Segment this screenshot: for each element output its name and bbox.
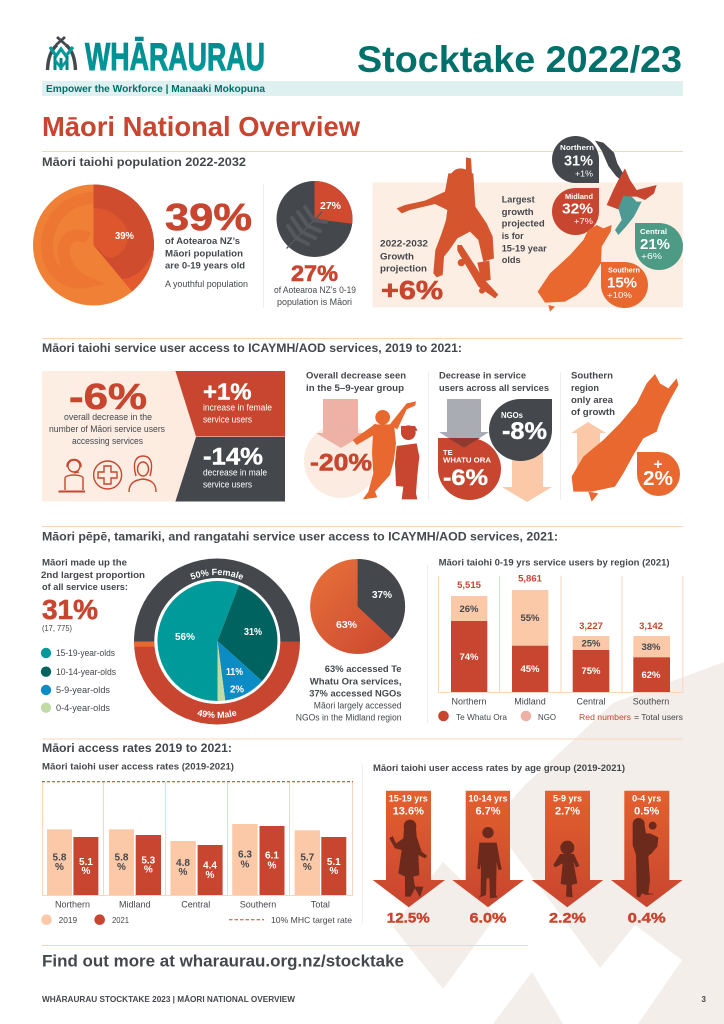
chart: access rates by region [41, 762, 353, 925]
bars: southern: % [268, 860, 277, 871]
text block: pie explanation: Māori largely accessed [314, 700, 402, 710]
arrow: 10-14 yrs [452, 791, 524, 926]
bars: midland [109, 829, 161, 910]
text block: pie explanation: Whatu Ora services, [310, 677, 402, 688]
callout: central: +6% [641, 251, 663, 261]
stat: 31 percent of all users [41, 558, 145, 633]
legend: years and target: 2019 [59, 915, 77, 925]
callout: northern: Northern [560, 143, 594, 152]
callout: ngos: NGOs [501, 411, 524, 420]
text block: pie explanation: NGOs in the Midland region [296, 713, 402, 723]
legend: service type: = Total users [634, 712, 683, 722]
stat: 27 percent: of Aotearoa NZ’s 0-19 [274, 285, 356, 295]
bars: southern: % [241, 860, 250, 871]
stat: 31 percent of all users: (17, 775) [42, 623, 72, 633]
bar: midland [512, 574, 548, 706]
pie chart: 27 percent with fern [276, 181, 353, 257]
callout: southern [601, 262, 648, 308]
bar: midland: Midland [514, 696, 546, 706]
bars: midland: % [144, 865, 153, 876]
callout: southern: Southern [608, 266, 640, 275]
bar: northern: 74% [459, 652, 479, 663]
arrow: 5-9 yrs: 2.2% [549, 911, 586, 926]
bar: northern: 5,515 [457, 580, 482, 591]
callout: midland: Midland [565, 192, 593, 201]
stat: 31 percent of all users: 31% [42, 594, 98, 625]
bar: central: Central [576, 696, 606, 706]
stat: minus 6 percent: overall decrease in the [64, 412, 152, 422]
stat: 31 percent of all users: Māori made up the [42, 558, 127, 569]
legend: service type: NGO [538, 712, 556, 722]
text block: pie explanation [296, 664, 402, 723]
background logo pattern [393, 662, 724, 1024]
stat: 39 percent: are 0-19 years old [165, 260, 245, 272]
bar: central: 3,227 [579, 621, 603, 632]
bars: northern: 5.1 [79, 857, 93, 868]
callout: midland: +7% [574, 216, 593, 226]
arrow: down pink [316, 399, 366, 448]
callout: te whatu ora: TE [443, 448, 453, 457]
stat: 27 percent: 27% [291, 261, 338, 286]
icon: girl silhouette [389, 820, 427, 897]
chart: donut by gender and age: 56% [175, 632, 195, 643]
growth projection text: projection [380, 264, 427, 274]
bars: total: % [329, 866, 338, 877]
chart: donut by gender and age: 11% [226, 667, 243, 678]
bars: total: Total [311, 900, 330, 910]
panel: decrease across services: users across all services [439, 383, 549, 394]
bars: central [170, 841, 223, 910]
panel: female increase: service users [203, 415, 253, 425]
chart: donut by gender and age: 31% [244, 627, 262, 638]
stat: minus 6 percent [49, 376, 166, 446]
stat: 31 percent of all users: 2nd largest proportion [41, 570, 145, 581]
bar: central: 75% [581, 666, 601, 677]
panel: southern growth: Southern [571, 371, 613, 382]
panel: overall decrease [42, 371, 285, 502]
footer: 3 [702, 995, 706, 1004]
arrow: 5-9 yrs: 5-9 yrs [553, 794, 582, 804]
largest growth text: olds [502, 255, 521, 266]
bar: central: 25% [581, 639, 601, 650]
legend: service type: Te Whatu Ora [456, 712, 507, 722]
bars: southern: 6.1 [265, 850, 279, 861]
bars: central: % [179, 867, 188, 878]
stat: 27 percent [274, 261, 356, 307]
bars: southern: Southern [240, 900, 276, 910]
callout: central: Central [640, 227, 667, 236]
legend: age groups: 0-4-year-olds [56, 703, 111, 713]
footer: WHĀRAURAU STOCKTAKE 2023 | MĀORI NATIONAL OVERVIEW [42, 995, 295, 1004]
chart: donut by gender and age [134, 558, 300, 724]
panel: 5-9 year group: in the 5–9-year group [306, 383, 404, 394]
bar: midland: 45% [520, 664, 540, 675]
bars: total: 5.7 [300, 853, 315, 864]
largest growth text: is for [502, 231, 524, 242]
bars: northern: 5.8 [53, 853, 67, 864]
stat: 39 percent: Māori population [165, 248, 243, 260]
tagline band: Empower the Workforce | Manaaki Mokopuna [46, 83, 265, 95]
page heading: Māori National Overview [42, 111, 360, 142]
callout: plus 2 percent: + [654, 456, 663, 473]
panel: decrease across services: Decrease in service [439, 371, 526, 382]
stat: minus 6 percent: number of Māori service users [49, 424, 166, 434]
bars: midland: 5.3 [141, 856, 156, 867]
icon: skateboarder silhouette [397, 157, 498, 298]
icon: whāraurau logo mark [48, 37, 76, 70]
bars: southern [232, 824, 284, 910]
callout: southern: +10% [607, 290, 632, 300]
legend: age groups: 5-9-year-olds [56, 685, 111, 695]
growth projection text: Growth [380, 252, 414, 262]
bar: northern: Northern [451, 696, 487, 706]
panel: 5-9 year group [304, 371, 419, 499]
arrow: peach up [571, 422, 606, 473]
legend: age groups: 15-19-year-olds [56, 648, 116, 658]
panel: decrease across services [438, 371, 552, 502]
call to action: Find out more at wharaurau.org.nz/stocktake [42, 952, 404, 971]
bars: northern: % [55, 862, 64, 873]
panel: male decrease: service users [203, 480, 253, 490]
text block: pie explanation: 37% accessed NGOs [309, 688, 402, 700]
arrow: 0-4 yrs: 0.4% [628, 911, 666, 926]
growth projection text: 2022-2032 [380, 238, 428, 250]
section heading: 2021 access: Māori pēpē, tamariki, and rangatahi service user access to ICAYMH/AOD services, 2021: [42, 530, 558, 544]
callout: midland: 32% [562, 200, 593, 218]
legend: age groups [41, 648, 117, 713]
chart: access rates by region: Māori taiohi user access rates (2019-2021) [42, 762, 234, 773]
legend: age groups: 10-14-year-olds [56, 667, 117, 677]
callout: plus 2 percent: 2% [643, 468, 673, 490]
largest growth text: 15-19 year [502, 244, 547, 255]
callout: ngos [489, 399, 552, 461]
section heading: access rates: Māori access rates 2019 to 2021: [42, 741, 232, 755]
arrow: 10-14 yrs: 6.7% [475, 805, 501, 817]
callout: te whatu ora: WHATU ORA [443, 456, 492, 465]
bars: southern: 6.3 [238, 850, 252, 861]
bar: southern: 62% [641, 670, 661, 681]
arrow: peach down [502, 450, 552, 502]
bar: southern: Southern [633, 696, 669, 706]
pie chart: 39 percent koru: 39% [115, 231, 134, 242]
callout: te whatu ora: -6% [443, 465, 488, 490]
section heading: service access: Māori taiohi service user access to ICAYMH/AOD services, 2019 to 2021: [42, 341, 462, 355]
bar: northern: 26% [459, 604, 479, 615]
callout: central: 21% [640, 236, 670, 253]
chart: donut by gender and age: 49% Male [197, 710, 236, 718]
chart: service users by region: Māori taiohi 0-19 yrs service users by region (2021) [439, 558, 670, 569]
arrow: 15-19 yrs: 13.6% [393, 805, 424, 817]
bar: southern: 38% [641, 642, 661, 653]
bars: central: 4.8 [176, 858, 190, 869]
legend: service type [438, 711, 683, 722]
callout: plus 2 percent [637, 452, 680, 496]
bar: midland: 55% [520, 613, 540, 624]
icon: fern [287, 207, 326, 248]
arrow: 0-4 yrs [611, 791, 683, 926]
bars: midland: 5.8 [115, 853, 129, 864]
bars: northern [47, 829, 98, 910]
growth projection text: +6% [381, 275, 443, 305]
stat: minus 20 percent: -20% [310, 450, 372, 477]
panel: southern growth: region [571, 383, 599, 394]
legend: years and target: 2021 [112, 915, 129, 925]
panel: male decrease [175, 437, 285, 502]
pie chart: 39 percent koru [33, 184, 154, 306]
stat: minus 6 percent: accessing services [72, 436, 144, 446]
header logo [48, 36, 265, 79]
panel: southern growth: of growth [571, 407, 615, 418]
largest growth text [502, 195, 547, 266]
icon: small girl silhouette [553, 841, 579, 897]
chart: donut by gender and age: 50% Female [190, 568, 243, 580]
bar: southern: 3,142 [639, 621, 663, 632]
pie chart: 27 percent with fern: 27% [320, 201, 341, 212]
chart: pie te whatu ora vs ngo: 63% [336, 620, 357, 631]
panel: male decrease: -14% [203, 443, 263, 470]
legend: service type: Red numbers [579, 712, 631, 722]
chart: access rates by age group: Māori taiohi user access rates by age group (2019-2021) [373, 763, 625, 774]
arrow: 15-19 yrs: 15-19 yrs [389, 794, 428, 804]
callout: southern: 15% [607, 275, 637, 292]
bars: total: 5.1 [327, 857, 341, 868]
largest growth text: Largest [502, 195, 535, 206]
stat: minus 6 percent: -6% [69, 376, 147, 417]
icon: headset worker [58, 460, 85, 492]
callout: northern: 31% [564, 152, 593, 170]
bars: northern: % [82, 866, 91, 877]
legend: years and target: 10% MHC target rate [271, 915, 352, 925]
bars: midland: % [117, 862, 126, 873]
bars: midland: Midland [119, 900, 151, 910]
panel: female increase: increase in female [203, 403, 272, 413]
panel: female increase: +1% [203, 378, 252, 404]
bar: central [573, 621, 609, 706]
arrow: 15-19 yrs: 12.5% [387, 911, 430, 926]
stat: 39 percent: of Aotearoa NZ’s [165, 236, 240, 247]
callout: midland [552, 188, 599, 235]
chart: access rates by age group [373, 763, 683, 926]
arrow: 15-19 yrs [373, 791, 445, 926]
map: new zealand regions [538, 141, 657, 312]
chart: pie te whatu ora vs ngo: 37% [372, 590, 392, 601]
arrow: 0-4 yrs: 0-4 yrs [632, 794, 661, 804]
icon: boy silhouette [477, 827, 502, 898]
bars: northern: Northern [55, 900, 90, 910]
largest growth text: growth [502, 207, 534, 218]
tagline band [42, 81, 683, 96]
callout: northern: +1% [575, 168, 593, 178]
panel: southern growth [571, 371, 680, 502]
bars: central: Central [181, 900, 210, 910]
icon: medical cross [94, 461, 122, 489]
panel: southern growth: only area [571, 395, 614, 406]
map: south island [572, 374, 678, 502]
panel: 5-9 year group: Overall decrease seen [306, 371, 406, 382]
icon: adult holding child silhouette [633, 818, 658, 897]
stat: 39 percent [165, 197, 252, 289]
panel: growth projection [372, 136, 683, 312]
title: stocktake: Stocktake 2022/23 [357, 39, 682, 80]
stat: 39 percent: A youthful population [165, 279, 248, 289]
wordmark: WHĀRAURAU [85, 36, 265, 79]
arrow: 5-9 yrs [532, 791, 603, 926]
arrow: 10-14 yrs: 10-14 yrs [468, 794, 508, 804]
target line [42, 781, 353, 783]
icon: adult with taiaha and child [353, 401, 419, 499]
footer [42, 995, 706, 1004]
section heading: population: Māori taiohi population 2022-2032 [42, 155, 246, 169]
stat: 27 percent: population is Māori [277, 297, 352, 307]
panel: female increase [175, 371, 285, 436]
arrow: 10-14 yrs: 6.0% [470, 911, 506, 926]
bar: northern [451, 580, 487, 706]
bars: total: % [303, 862, 312, 873]
callout: ngos: -8% [502, 418, 547, 445]
legend: years and target [41, 914, 352, 925]
icon: female clinician [129, 456, 156, 492]
arrow: grey down [439, 399, 489, 448]
panel: male decrease: decrease in male [203, 468, 267, 478]
bars: central: % [206, 870, 215, 881]
chart: donut by gender and age: 2% [230, 685, 244, 696]
bar: southern [633, 621, 670, 706]
stat: 39 percent: 39% [165, 197, 252, 239]
arrow: 0-4 yrs: 0.5% [634, 805, 659, 817]
text block: pie explanation: 63% accessed Te [325, 664, 402, 675]
bars: total [295, 830, 346, 910]
bars: central: 4.4 [203, 861, 217, 872]
stat: 31 percent of all users: of all service users: [42, 582, 128, 593]
largest growth text: projected [502, 219, 545, 230]
chart: pie te whatu ora vs ngo [310, 559, 405, 654]
growth projection text [380, 238, 443, 305]
callout: central [635, 223, 683, 270]
chart: service users by region [438, 558, 683, 722]
callout: northern [552, 136, 599, 183]
arrow: 5-9 yrs: 2.7% [555, 805, 580, 817]
callout: te whatu ora [438, 438, 501, 500]
bar: midland: 5,861 [518, 574, 543, 585]
